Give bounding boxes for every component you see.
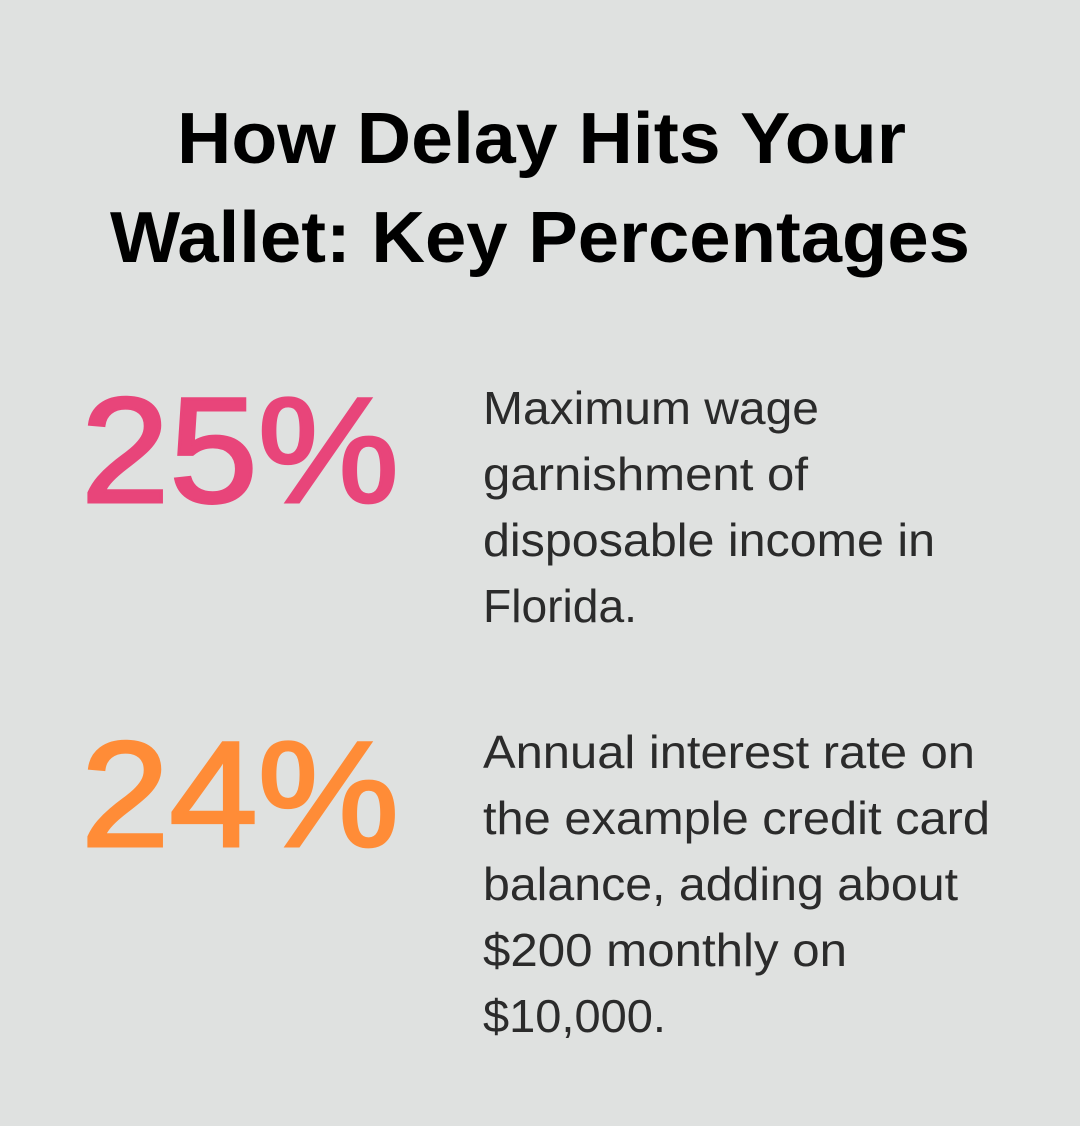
stat: 25% wage garnishment — [81, 366, 935, 632]
description: wage garnishment: garnishment of — [483, 448, 808, 500]
title — [110, 99, 970, 278]
description: interest rate: $10,000. — [483, 990, 666, 1042]
description: wage garnishment: Maximum wage — [483, 382, 819, 434]
description: interest rate: Annual interest rate on — [483, 726, 975, 778]
description: wage garnishment: Florida. — [483, 580, 637, 632]
big number: 25%: 25% — [81, 366, 399, 534]
description: wage garnishment: disposable income in — [483, 514, 935, 566]
description: interest rate — [483, 726, 990, 1042]
big number: 24%: 24% — [81, 710, 399, 878]
description: wage garnishment — [483, 382, 935, 632]
description: interest rate: $200 monthly on — [483, 924, 847, 976]
description: interest rate: balance, adding about — [483, 858, 958, 910]
title: Wallet: Key Percentages — [110, 198, 970, 278]
title: How Delay Hits Your — [177, 99, 906, 179]
stat: 24% interest rate — [81, 710, 990, 1042]
description: interest rate: the example credit card — [483, 792, 990, 844]
